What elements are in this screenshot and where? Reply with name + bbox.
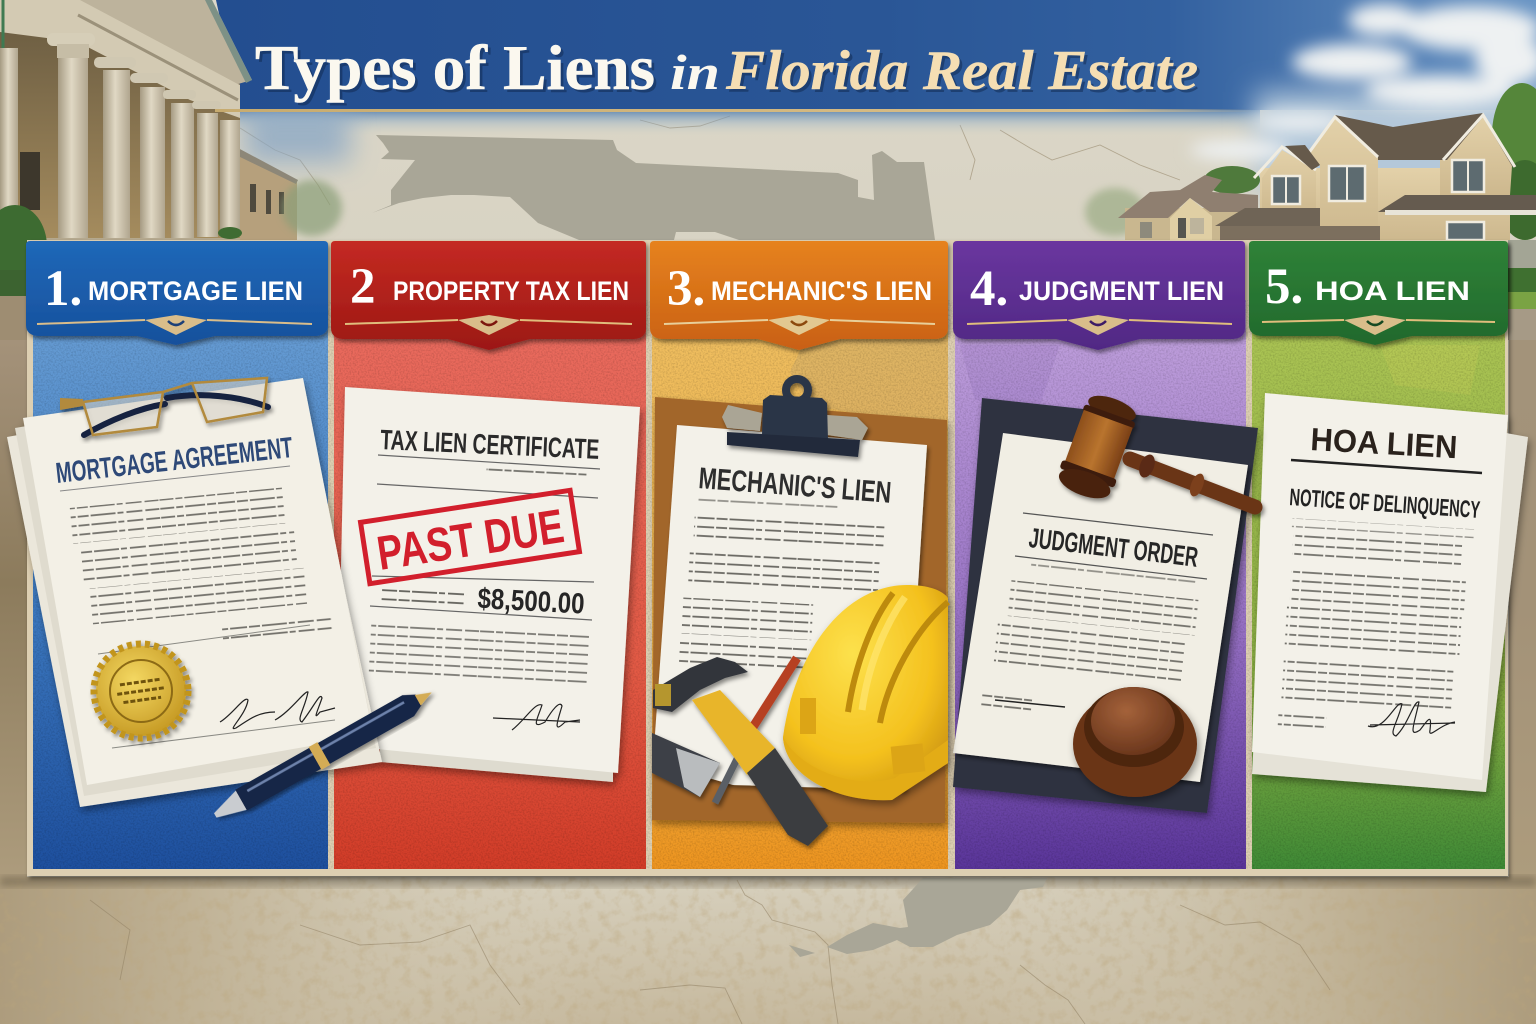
icon: fountain pen	[209, 681, 438, 826]
document: judgment order	[953, 433, 1248, 782]
title: Types of Liens	[258, 36, 658, 106]
header tab 2: PROPERTY TAX LIEN	[393, 276, 629, 306]
header tab 3	[650, 241, 948, 350]
header tab 2: 2	[350, 259, 376, 315]
header tab 2	[331, 241, 646, 350]
icon: hard hat	[783, 585, 948, 800]
panel 1 content: mortgage lien	[7, 378, 438, 826]
header tab 5	[1249, 241, 1508, 345]
header tab 4: 4.	[970, 261, 1008, 317]
clipboard	[652, 397, 947, 823]
title	[215, 33, 1255, 112]
panel 4 content: judgment lien	[953, 389, 1258, 813]
title: Types of Liens	[255, 33, 655, 103]
icon: gavel	[1053, 389, 1255, 507]
pliers	[652, 733, 720, 797]
icon: clipboard clip	[722, 379, 868, 457]
title: in	[670, 44, 720, 100]
side wing	[238, 148, 298, 240]
sky wash under banner	[240, 108, 1260, 163]
document: mechanic's lien	[653, 425, 927, 790]
left ground	[0, 270, 27, 296]
document heading: MECHANIC'S LIEN	[697, 462, 892, 510]
hammer handle	[692, 690, 775, 775]
header tab 4: JUDGMENT LIEN	[1019, 276, 1224, 306]
signature	[1368, 702, 1455, 736]
panel 3 content: mechanic's lien	[652, 379, 948, 846]
courthouse	[0, 0, 342, 340]
hammer head	[653, 657, 748, 712]
icon: gold seal	[94, 644, 188, 738]
document heading: JUDGMENT ORDER	[1027, 522, 1200, 573]
document stack: tax lien certificate	[337, 387, 640, 782]
header tab 3: MECHANIC'S LIEN	[711, 276, 932, 306]
panel backgrounds	[33, 300, 1505, 869]
document stack: HOA lien notice	[1252, 393, 1528, 792]
clouds	[1190, 4, 1536, 160]
dark folder	[953, 398, 1258, 813]
title: Florida Real Estate	[728, 43, 1201, 105]
header tab 5: HOA LIEN	[1315, 276, 1470, 306]
title: Florida Real Estate	[725, 40, 1198, 102]
icon: hammer and tools	[652, 657, 828, 846]
signature	[493, 704, 580, 730]
document heading: MORTGAGE AGREEMENT	[54, 432, 295, 490]
stamp: past due: PAST DUE	[374, 500, 567, 581]
document stack: mortgage agreement	[7, 378, 382, 807]
header tab 3: 3.	[667, 261, 705, 317]
header tab 1: 1.	[44, 261, 82, 317]
neighbourhood houses	[1085, 166, 1260, 240]
header tab 5: 5.	[1265, 259, 1303, 315]
pen	[753, 658, 797, 727]
panel 2 content: property tax lien	[337, 387, 640, 782]
icon: sound block	[1073, 687, 1197, 797]
panel 5 content: HOA lien	[1252, 393, 1528, 792]
header tab 4	[953, 241, 1245, 350]
header tab 1	[26, 241, 328, 345]
large house	[1215, 83, 1536, 340]
icon: eyeglasses	[60, 378, 268, 435]
document heading: TAX LIEN CERTIFICATE	[380, 424, 600, 465]
header tab 1: MORTGAGE LIEN	[88, 276, 303, 306]
frame behind panels	[27, 240, 1508, 876]
top banner	[216, 0, 1536, 192]
signature	[220, 692, 335, 729]
amount: $8,500.00	[477, 583, 585, 621]
document heading: HOA LIEN	[1310, 421, 1458, 465]
Florida map silhouette	[372, 135, 1047, 957]
